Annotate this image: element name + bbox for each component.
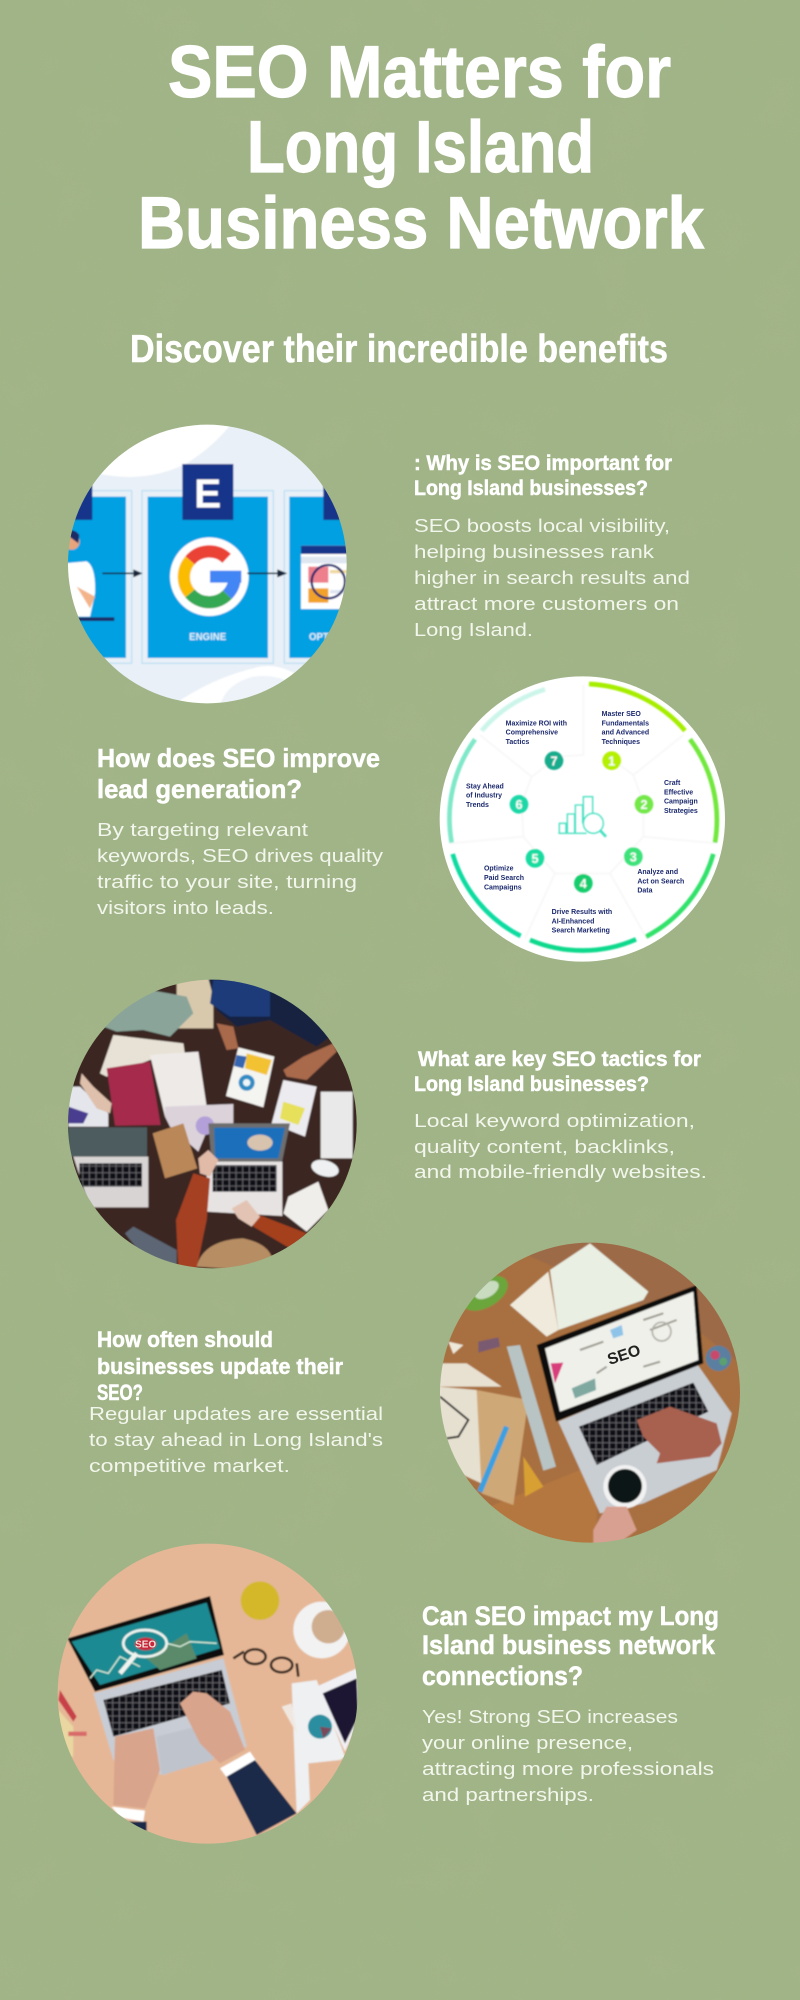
- step labels: Fundamentals: [602, 720, 649, 727]
- question 5: network connections: [422, 1601, 719, 1805]
- body text: attract more customers on: [414, 594, 679, 614]
- step labels: Craft: [664, 780, 681, 787]
- step labels: AI-Enhanced: [552, 918, 594, 925]
- question 4: how often to update: [89, 1327, 383, 1476]
- heading: How often should: [97, 1327, 273, 1352]
- heading: [414, 1048, 701, 1096]
- step labels: Effective: [664, 789, 693, 796]
- body text: competitive market.: [89, 1456, 290, 1476]
- step labels: Strategies: [664, 808, 698, 815]
- body text: higher in search results and: [414, 568, 690, 588]
- numbered badges: 4: [580, 877, 587, 891]
- body text: SEO boosts local visibility,: [414, 516, 670, 536]
- title: SEO Matters for: [168, 32, 671, 113]
- numbered badges: 1: [608, 754, 615, 768]
- step labels: Search Marketing: [552, 928, 610, 935]
- step labels: Comprehensive: [506, 730, 558, 737]
- image: search engine optimization diagram: [68, 424, 347, 704]
- body text: Local keyword optimization,: [414, 1111, 695, 1131]
- title: Business Network: [138, 183, 704, 264]
- image: team working around a table with laptops: [67, 978, 358, 1270]
- body text: Regular updates are essential: [89, 1404, 383, 1424]
- numbered badges: 6: [515, 798, 523, 812]
- step labels: Act on Search: [637, 878, 684, 885]
- heading: [422, 1601, 719, 1691]
- body text: to stay ahead in Long Island's: [89, 1430, 383, 1450]
- step labels: Stay Ahead: [466, 783, 504, 790]
- step labels: Trends: [466, 802, 489, 809]
- image: hands typing on laptop with SEO magnifier on screen: [57, 1543, 360, 1846]
- step labels: and Advanced: [602, 730, 649, 737]
- body text: [414, 516, 690, 640]
- body text: helping businesses rank: [414, 542, 655, 562]
- body text: quality content, backlinks,: [414, 1137, 675, 1157]
- numbered badges: 3: [630, 850, 637, 864]
- heading: Long Island businesses?: [414, 477, 648, 500]
- body text: [414, 1111, 707, 1182]
- circular seven step SEO diagram: [440, 676, 725, 962]
- heading: [414, 452, 672, 500]
- numbered badges: 2: [640, 798, 648, 812]
- step labels: Maximize ROI with: [506, 720, 567, 727]
- body text: [89, 1404, 383, 1476]
- progress ring: [449, 684, 717, 951]
- numbered badges: [510, 751, 653, 893]
- body text: your online presence,: [422, 1733, 633, 1753]
- step labels: of Industry: [466, 793, 502, 800]
- step labels: Data: [637, 888, 653, 895]
- body text: keywords, SEO drives quality: [97, 846, 383, 866]
- body text: By targeting relevant: [97, 820, 308, 840]
- heading: [97, 743, 380, 804]
- heading: How does SEO improve: [97, 743, 380, 773]
- body text: Long Island.: [414, 620, 533, 640]
- heading: SEO?: [97, 1380, 143, 1405]
- body text: visitors into leads.: [97, 898, 274, 918]
- body text: Yes! Strong SEO increases: [422, 1707, 678, 1727]
- image: hands typing on laptop with SEO magnifier on screen: SEO: [135, 1640, 156, 1651]
- heading: Long Island businesses?: [414, 1073, 649, 1096]
- icon: bar chart with magnifying glass: [558, 797, 606, 837]
- body text: traffic to your site, turning: [97, 872, 357, 892]
- numbered badges: 5: [531, 852, 539, 866]
- heading: : Why is SEO important for: [414, 452, 672, 475]
- step labels: Techniques: [602, 739, 640, 746]
- image: search engine optimization diagram: E: [194, 470, 221, 516]
- image: laptop showing SEO on a wooden desk: [438, 1242, 742, 1545]
- subtitle: Discover their incredible benefits: [130, 328, 668, 371]
- heading: [97, 1327, 343, 1405]
- step labels: Paid Search: [484, 875, 524, 882]
- image: laptop showing SEO on a wooden desk: SEO: [605, 1342, 643, 1369]
- question 3: key SEO tactics: [414, 1048, 707, 1182]
- body text: and partnerships.: [422, 1785, 594, 1805]
- step labels: [466, 711, 698, 935]
- body text: attracting more professionals: [422, 1759, 714, 1779]
- step labels: Tactics: [506, 739, 529, 746]
- image: search engine optimization diagram: ENGINE: [189, 632, 227, 643]
- step labels: Campaigns: [484, 884, 522, 891]
- title: [138, 32, 704, 264]
- step labels: Master SEO: [602, 711, 641, 718]
- heading: lead generation?: [97, 774, 302, 804]
- heading: businesses update their: [97, 1354, 343, 1379]
- step labels: Analyze and: [637, 869, 678, 876]
- numbered badges: 7: [550, 754, 558, 768]
- heading: Island business network: [422, 1630, 716, 1660]
- question 2: lead generation: [97, 743, 383, 918]
- body text: and mobile-friendly websites.: [414, 1162, 707, 1182]
- spokes: [450, 685, 717, 938]
- heading: Can SEO impact my Long: [422, 1601, 719, 1631]
- body text: [422, 1707, 714, 1805]
- step labels: Optimize: [484, 866, 514, 873]
- step labels: Campaign: [664, 799, 698, 806]
- title: Long Island: [247, 107, 594, 188]
- question 1: why SEO is important: [414, 452, 690, 640]
- heading: connections?: [422, 1661, 583, 1691]
- body text: [97, 820, 383, 918]
- heading: What are key SEO tactics for: [418, 1048, 701, 1071]
- step labels: Drive Results with: [552, 909, 612, 916]
- image: search engine optimization diagram: OPTIMIZATION: [309, 632, 378, 643]
